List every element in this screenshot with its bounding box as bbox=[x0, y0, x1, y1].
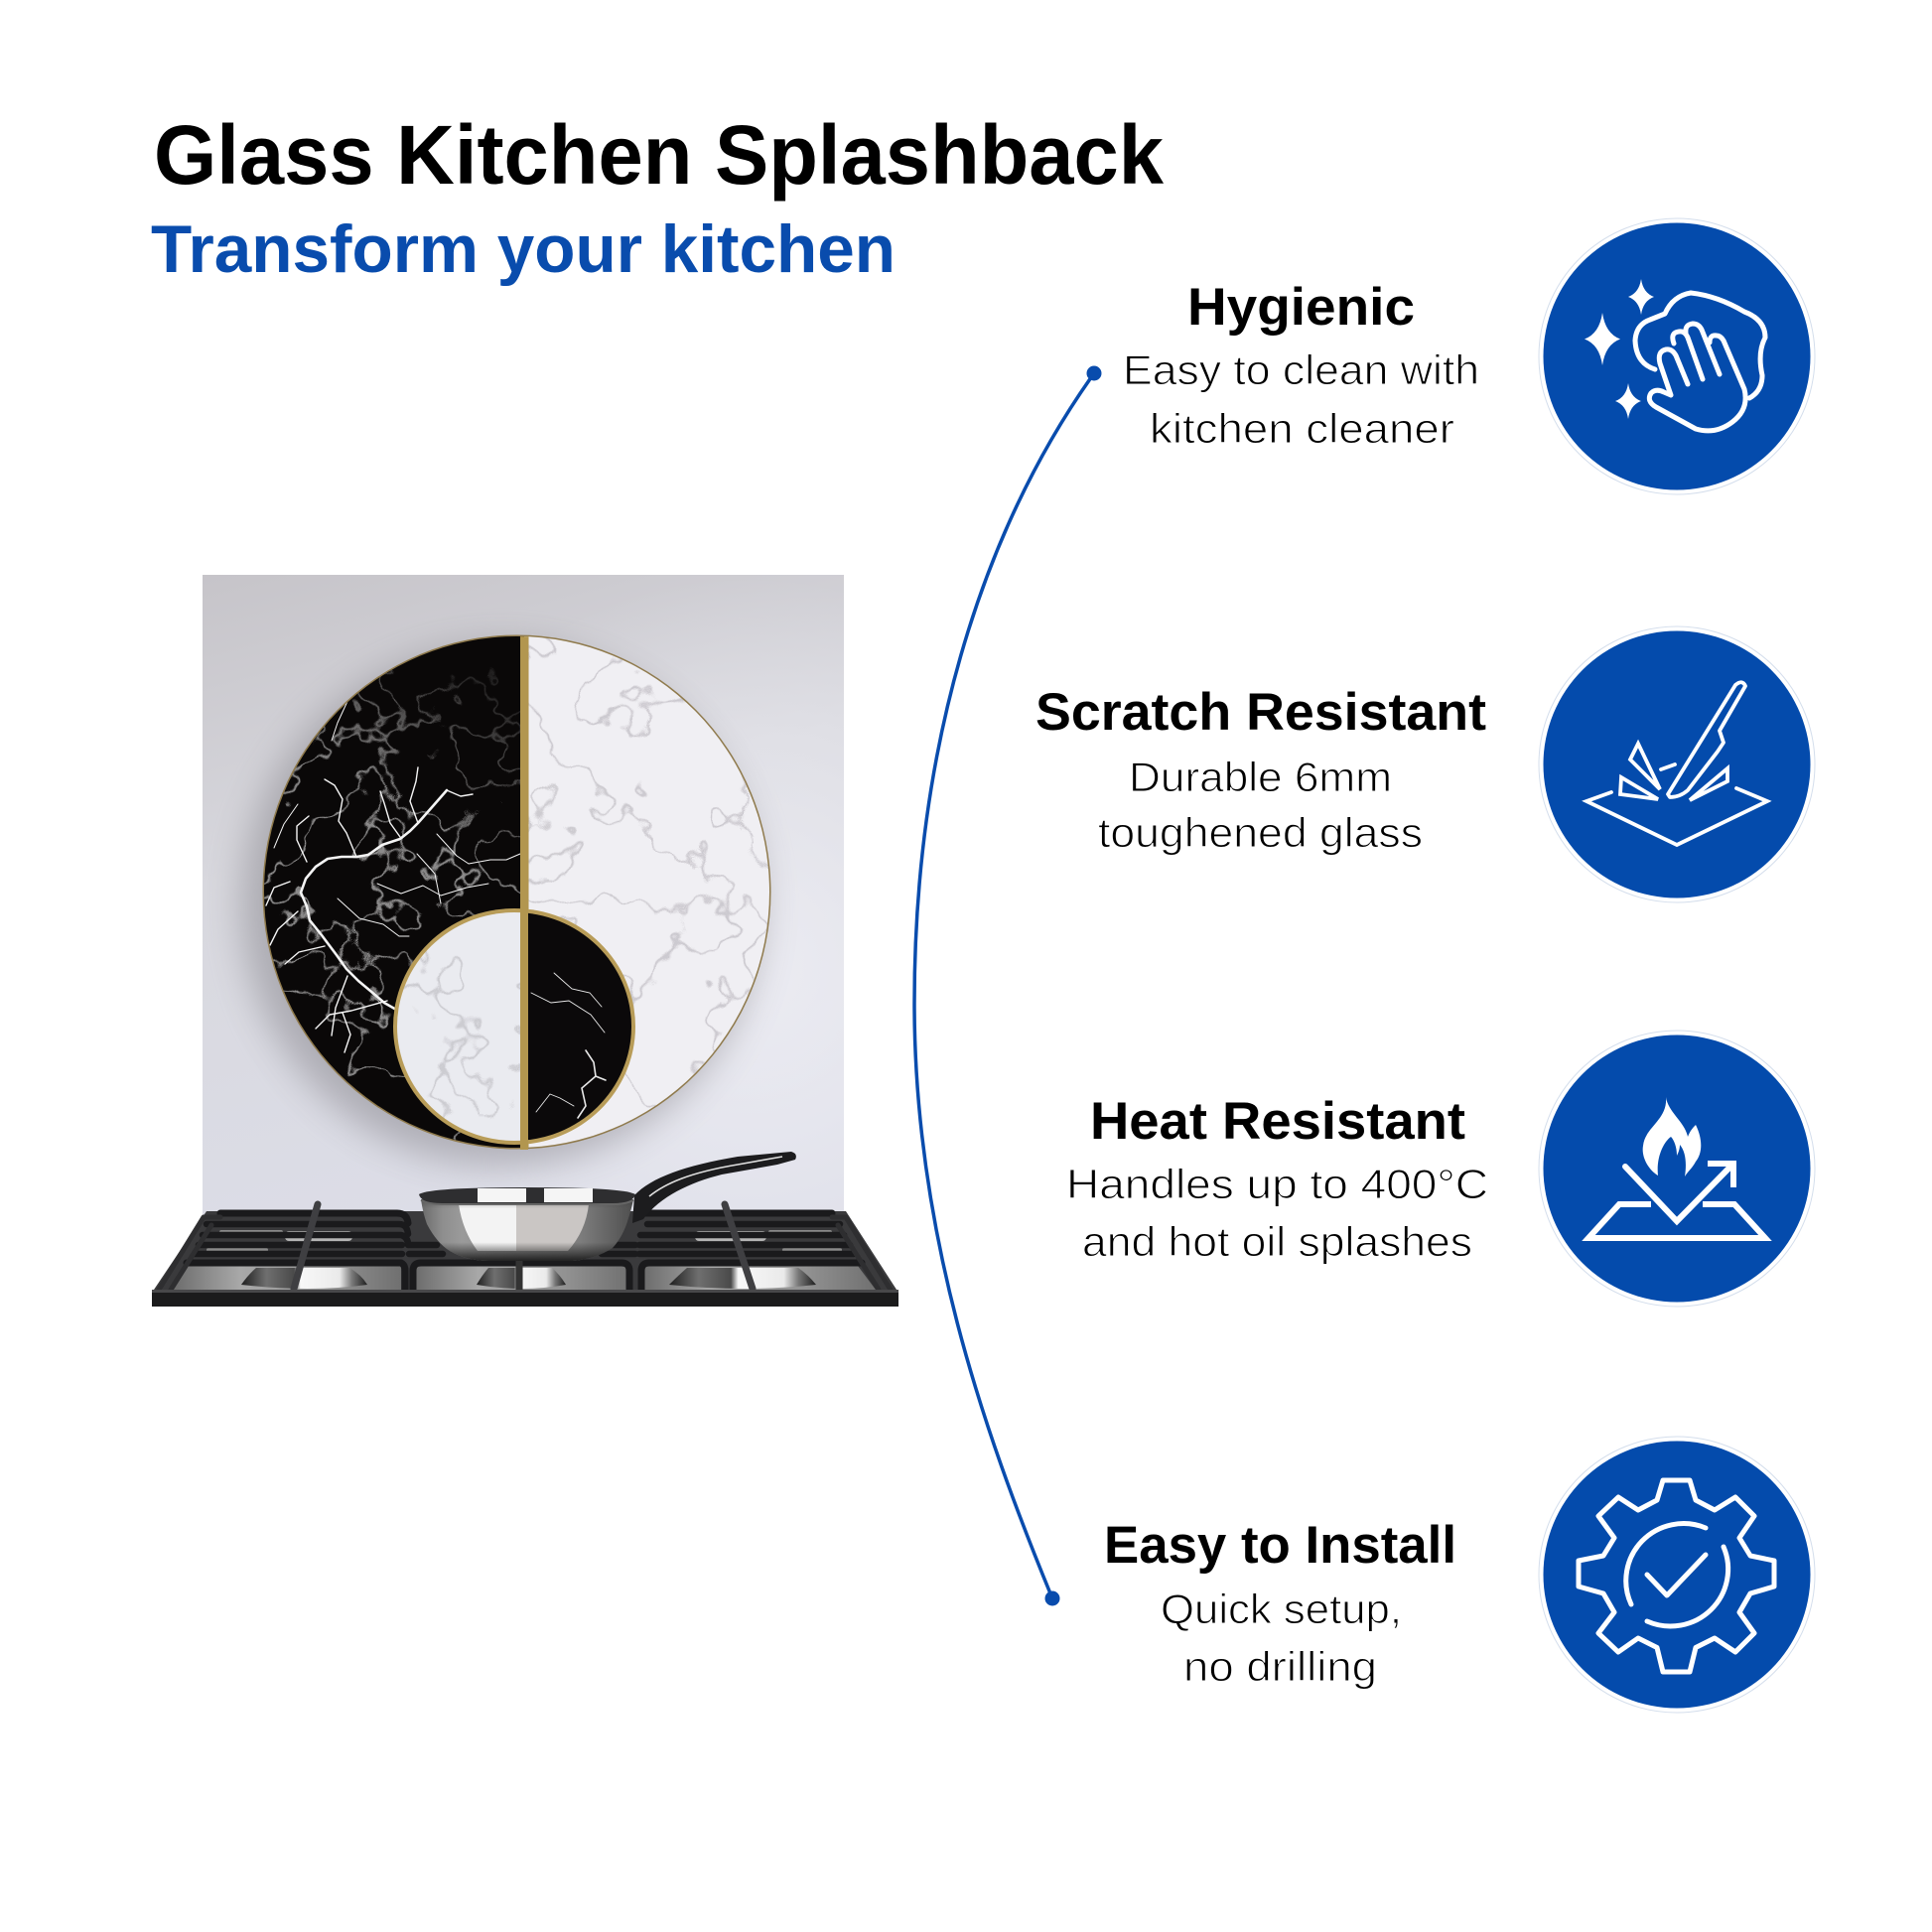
heading: Easy to Install: Easy to Install bbox=[1104, 1516, 1456, 1575]
steel plates bbox=[171, 1266, 876, 1290]
description: Hygienic: Easy to clean with bbox=[1123, 346, 1479, 393]
gas hob bbox=[152, 1204, 898, 1307]
small inset circle bbox=[392, 907, 638, 1150]
description: Heat Resistant: and hot oil splashes bbox=[1082, 1218, 1472, 1265]
description: Easy to Install: Quick setup, bbox=[1161, 1586, 1402, 1632]
icon: hand wiping with sparkles bbox=[1539, 218, 1815, 494]
description: Scratch Resistant: toughened glass bbox=[1098, 809, 1423, 856]
description: Scratch Resistant: Durable 6mm bbox=[1129, 754, 1392, 800]
infographic canvas bbox=[151, 123, 1815, 1714]
description: Heat Resistant: Handles up to 400°C bbox=[1066, 1161, 1488, 1207]
feature: Easy to Install bbox=[1104, 1437, 1815, 1713]
feature: Hygienic bbox=[1123, 218, 1815, 494]
frying pan bbox=[419, 1152, 796, 1261]
icon: knife on glass surface bbox=[1539, 626, 1815, 902]
marble disc bbox=[258, 631, 774, 1153]
feature: Heat Resistant bbox=[1066, 1031, 1815, 1307]
icon: flame on reflective surface bbox=[1539, 1031, 1815, 1307]
curved connector line with end dots bbox=[914, 365, 1102, 1606]
wall panel bbox=[203, 575, 844, 1230]
product photo: splashback above hob bbox=[152, 575, 898, 1307]
grate bars bbox=[159, 1204, 891, 1290]
subtitle: Transform your kitchen bbox=[151, 211, 896, 287]
burners bbox=[241, 1231, 816, 1289]
heading: Heat Resistant: Heat Resistant bbox=[1090, 1092, 1465, 1151]
front edge bbox=[152, 1292, 898, 1307]
icon: gear with check mark bbox=[1539, 1437, 1815, 1713]
description: Heat Resistant bbox=[1066, 1161, 1488, 1265]
description: Hygienic bbox=[1123, 346, 1479, 452]
description: Hygienic: kitchen cleaner bbox=[1150, 405, 1454, 452]
title: Glass Kitchen Splashback bbox=[154, 108, 1164, 202]
feature: Scratch Resistant bbox=[1035, 626, 1815, 902]
description: Easy to Install bbox=[1161, 1586, 1402, 1690]
heading: Hygienic: Hygienic bbox=[1187, 278, 1415, 337]
description: Easy to Install: no drilling bbox=[1183, 1643, 1377, 1690]
heading: Scratch Resistant: Scratch Resistant bbox=[1035, 683, 1486, 742]
description: Scratch Resistant bbox=[1098, 754, 1423, 856]
